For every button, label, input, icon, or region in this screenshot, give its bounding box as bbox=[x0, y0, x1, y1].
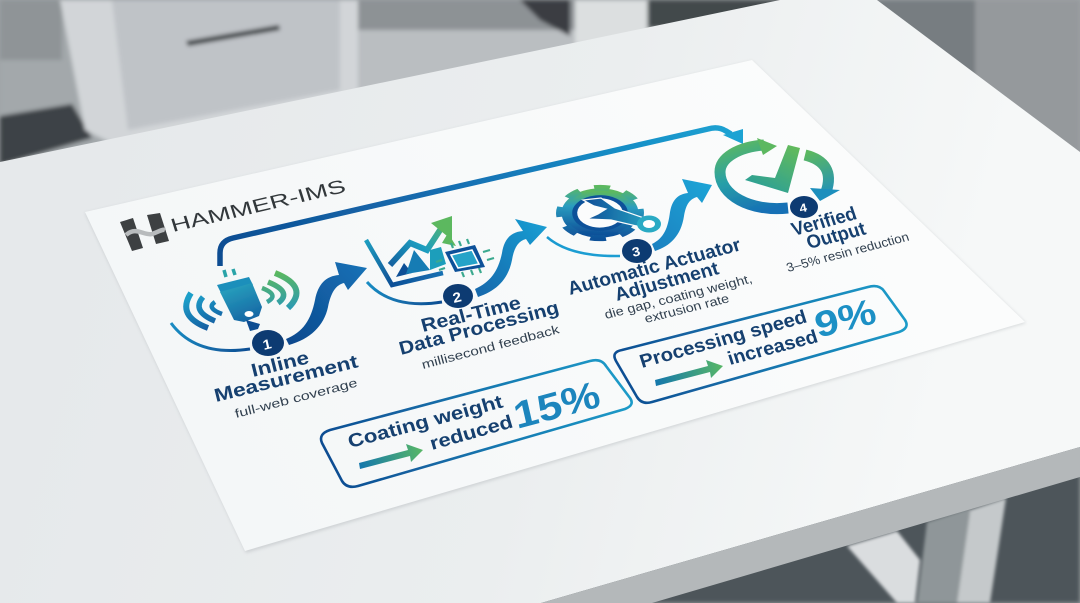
callout: processing speed increased 9% bbox=[614, 286, 907, 403]
arc under icon bbox=[171, 323, 250, 351]
paper shadow bbox=[85, 61, 1026, 553]
icon: check mark with cycle arrows bbox=[720, 138, 840, 209]
icon: sensor with signal waves bbox=[186, 269, 296, 331]
step 4 label: Output bbox=[804, 219, 869, 253]
logo: Hammer-IMS bbox=[120, 176, 348, 251]
icon: chart with chip bbox=[366, 216, 494, 285]
step 3 label bbox=[565, 235, 754, 326]
number badge 3: 3 bbox=[631, 244, 642, 260]
callout: processing speed increased 9%: 9% bbox=[811, 292, 880, 346]
step 2 label: Data Processing bbox=[397, 298, 561, 360]
step 2: real-time data processing bbox=[366, 216, 561, 372]
step 4 label: 3–5% resin reduction bbox=[784, 230, 911, 275]
number badge 2: 2 bbox=[451, 290, 463, 307]
step 1: inline measurement bbox=[171, 262, 367, 421]
green arrow bbox=[359, 444, 423, 469]
callout: coating weight reduced 15%: Coating weight bbox=[345, 392, 506, 452]
step 3 label: die gap, coating weight, bbox=[603, 271, 754, 322]
table front edge bbox=[541, 447, 1080, 603]
step 4 label bbox=[784, 204, 911, 275]
step 4: verified output bbox=[720, 138, 911, 275]
logo wordmark: HAMMER-IMS bbox=[168, 176, 348, 237]
callout: processing speed increased 9%: Processing speed bbox=[637, 307, 809, 372]
step 2 label: Real-Time bbox=[419, 293, 523, 337]
icon: gear and wrench bbox=[555, 184, 661, 242]
number badge 1: 1 bbox=[261, 337, 273, 354]
callout: coating weight reduced 15% bbox=[321, 360, 632, 487]
logo mark bbox=[120, 213, 169, 251]
step 1 label: full-web coverage bbox=[233, 375, 359, 421]
green arrow bbox=[655, 360, 723, 386]
step 2 label: millisecond feedback bbox=[420, 322, 561, 372]
arc under icon bbox=[547, 237, 620, 256]
step 3: automatic actuator adjustment bbox=[547, 179, 754, 326]
callout: coating weight reduced 15%: reduced bbox=[427, 412, 515, 454]
step 1 label: Measurement bbox=[212, 351, 361, 407]
step 3 label: Automatic Actuator bbox=[565, 235, 744, 299]
paper sheet bbox=[85, 60, 1025, 551]
number badge 4 bbox=[790, 196, 818, 218]
number badge 3 bbox=[622, 239, 652, 263]
step 1 label bbox=[212, 348, 361, 421]
arrow to step 2 bbox=[286, 262, 367, 345]
callout: coating weight reduced 15%: 15% bbox=[509, 373, 604, 437]
feedback loop arrow from step 1 to step 4 bbox=[220, 128, 743, 266]
step 1 label: Inline bbox=[249, 348, 311, 382]
arrow to step 4 bbox=[652, 179, 712, 251]
step 4 label: Verified bbox=[789, 204, 860, 240]
table legs bbox=[847, 498, 1006, 603]
step 3 label: Adjustment bbox=[612, 258, 722, 305]
arrow to step 3 bbox=[475, 219, 547, 297]
callout: processing speed increased 9%: increased bbox=[725, 327, 820, 369]
step 3 label: extrusion rate bbox=[643, 291, 731, 326]
arc under icon bbox=[367, 282, 442, 304]
number badge 4: 4 bbox=[798, 200, 808, 216]
number badge 2 bbox=[443, 284, 473, 308]
number badge 1 bbox=[252, 330, 284, 356]
